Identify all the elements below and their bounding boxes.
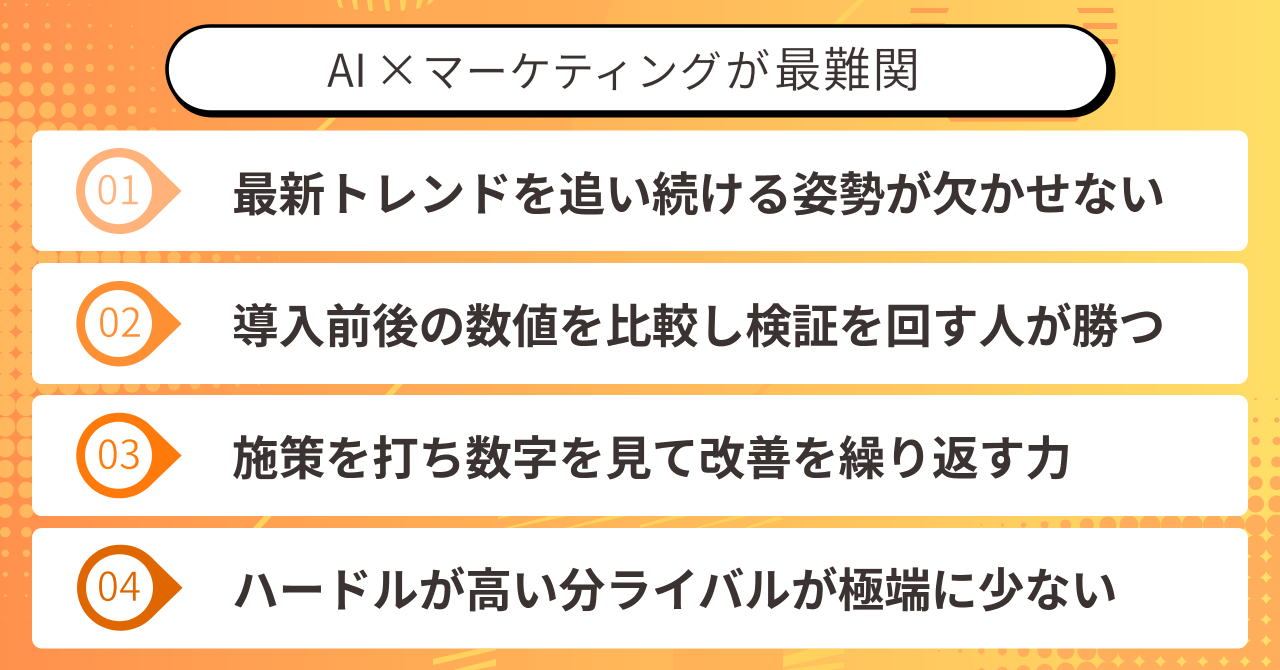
title text — [327, 32, 920, 101]
title text: × — [374, 35, 420, 101]
panel: item 04 — [32, 528, 1248, 648]
title text: マーケティング — [422, 39, 722, 100]
panel: item 02 — [32, 263, 1248, 384]
title text: AI — [327, 35, 367, 101]
icon: badge 02: 02 — [98, 291, 142, 349]
icon: badge 02 — [76, 281, 182, 366]
card — [32, 528, 1248, 648]
icon: badge 01 — [76, 148, 182, 234]
icon: badge 04: 04 — [97, 555, 141, 613]
yellow diagonal stripes — [253, 0, 1038, 670]
pill body — [167, 26, 1108, 112]
title pill — [167, 26, 1116, 118]
icon: badge 03: 03 — [97, 423, 141, 481]
card — [32, 130, 1248, 251]
title text: 最難関 — [774, 32, 920, 101]
item text 01: 最新トレンドを追い続ける姿勢が欠かせない — [232, 169, 1165, 221]
orange dashes top right — [910, 8, 1118, 122]
icon: badge 03 — [76, 413, 182, 498]
halftone dots: bottom right — [917, 398, 1280, 670]
item text 02: 導入前後の数値を比較し検証を回す人が勝つ — [232, 301, 1165, 353]
icon: badge 01: 01 — [96, 158, 141, 216]
card — [32, 263, 1248, 384]
icon: badge 04 — [77, 545, 183, 631]
panel: item 01 — [32, 130, 1248, 251]
panel: item 03 — [32, 395, 1248, 516]
item text 03: 施策を打ち数字を見て改善を繰り返す力 — [232, 433, 1072, 485]
background shapes — [320, 0, 783, 670]
card — [32, 395, 1248, 516]
title text: が — [725, 35, 770, 100]
pill shadow — [168, 29, 1116, 118]
halftone dots: top left — [0, 3, 176, 142]
halftone dots: left edge — [0, 141, 281, 617]
item text 04: ハードルが高い分ライバルが極端に少ない — [232, 565, 1118, 617]
